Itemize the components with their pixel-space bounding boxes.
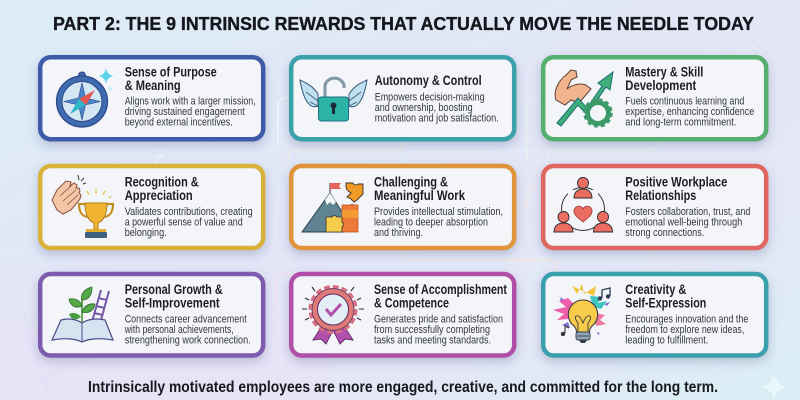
- heading: [374, 175, 465, 203]
- description: Encourages innovation and the: [625, 313, 748, 325]
- card: Challenging & Meaningful Work: [291, 166, 514, 248]
- heading: Appreciation: [125, 188, 193, 203]
- description: [375, 92, 499, 125]
- heading: Personal Growth &: [125, 282, 223, 297]
- heading: Recognition &: [125, 175, 199, 190]
- description: beyond external incentives.: [125, 116, 233, 128]
- description: Empowers decision-making: [375, 92, 485, 104]
- icon: winged padlock: [300, 78, 367, 121]
- heading: [125, 282, 223, 311]
- description: Aligns work with a larger mission,: [125, 96, 256, 108]
- description: strengthening work connection.: [125, 334, 251, 346]
- heading: [625, 175, 727, 203]
- heading: Autonomy & Control: [375, 73, 482, 88]
- heading: Self-Expression: [625, 296, 706, 311]
- description: [625, 95, 754, 128]
- heading: [625, 65, 703, 93]
- description: Generates pride and satisfaction: [374, 313, 503, 325]
- description: and long-term commitment.: [625, 116, 736, 128]
- card: Creativity & Self-Expression: [543, 274, 766, 356]
- icon: award badge with check: [302, 286, 364, 344]
- card: Recognition & Appreciation: [40, 166, 263, 248]
- heading: Mastery & Skill: [625, 65, 703, 80]
- description: with personal achievements,: [124, 324, 234, 336]
- description: Provides intellectual stimulation,: [374, 206, 503, 218]
- icon: muscle arm, arrow and gear: [555, 70, 613, 126]
- description: [124, 313, 251, 346]
- description: Fuels continuous learning and: [625, 95, 744, 107]
- description: and thriving.: [374, 227, 423, 239]
- icon: people and heart: [554, 178, 612, 232]
- heading: & Competence: [374, 296, 449, 311]
- icon: clapping hands and trophy: [52, 175, 113, 238]
- heading: Self-Improvement: [125, 296, 220, 311]
- description: tasks and meeting standards.: [374, 334, 491, 346]
- card: Sense of Accomplishment & Competence: [291, 274, 514, 356]
- heading: Sense of Purpose: [125, 64, 217, 80]
- heading: [125, 175, 199, 203]
- heading: Challenging &: [374, 175, 448, 190]
- description: and ownership, boosting: [375, 102, 473, 114]
- description: Validates contributions, creating: [125, 206, 253, 218]
- icon: light bulb with paint splash and notes: [553, 284, 610, 343]
- heading: [125, 64, 217, 93]
- description: from successfully completing: [374, 324, 490, 336]
- heading: Development: [625, 78, 697, 93]
- icon: mountain and puzzle pieces: [302, 183, 363, 232]
- icon: book, plant and ladder: [52, 287, 113, 342]
- heading: & Meaning: [125, 78, 181, 93]
- card: Mastery & Skill Development: [543, 57, 766, 139]
- heading: [374, 282, 507, 311]
- heading: Creativity &: [625, 282, 687, 297]
- footer statement: Intrinsically motivated employees are more engaged, creative, and committed for the long term.: [88, 379, 718, 396]
- card: Autonomy & Control: [291, 57, 514, 139]
- heading: Sense of Accomplishment: [374, 282, 507, 297]
- card: Sense of Purpose & Meaning: [40, 57, 263, 139]
- description: [625, 313, 748, 346]
- description: [625, 206, 750, 239]
- card: Positive Workplace Relationships: [543, 166, 766, 248]
- heading: [625, 282, 706, 311]
- title: PART 2: THE 9 INTRINSIC REWARDS THAT ACTUALLY MOVE THE NEEDLE TODAY: [53, 14, 754, 34]
- description: leading to fulfillment.: [625, 334, 708, 346]
- description: a powerful sense of value and: [125, 216, 243, 228]
- description: Connects career advancement: [125, 313, 247, 325]
- description: emotional well-being through: [625, 216, 742, 228]
- description: leading to deeper absorption: [374, 216, 488, 228]
- card: Personal Growth & Self-Improvement: [40, 274, 263, 356]
- description: motivation and job satisfaction.: [375, 113, 499, 125]
- description: strong connections.: [625, 227, 704, 239]
- heading: Positive Workplace: [625, 175, 727, 190]
- description: belonging.: [125, 227, 167, 239]
- description: [374, 206, 503, 239]
- icon: compass: [56, 68, 114, 127]
- description: freedom to explore new ideas,: [625, 324, 744, 336]
- description: [374, 313, 503, 346]
- description: expertise, enhancing confidence: [625, 106, 754, 118]
- heading: Relationships: [625, 188, 696, 203]
- heading: Meaningful Work: [374, 188, 465, 203]
- description: [125, 206, 253, 239]
- description: [125, 96, 256, 128]
- description: driving sustained engagement: [125, 106, 245, 118]
- description: Fosters collaboration, trust, and: [625, 206, 750, 218]
